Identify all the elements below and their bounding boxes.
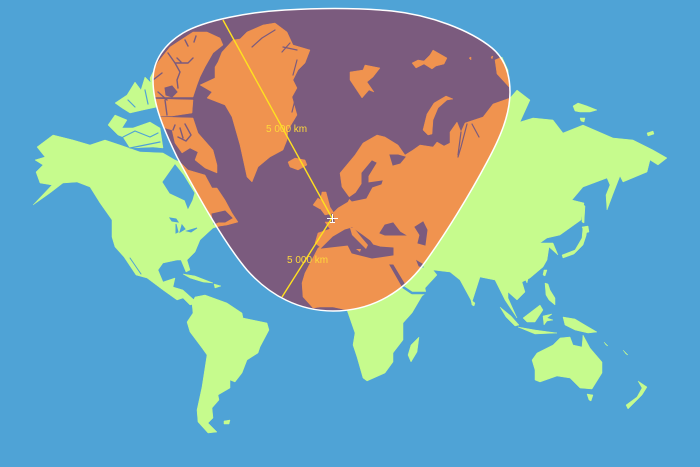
radius boundary outline — [153, 9, 510, 311]
distance label south: 5 000 km — [287, 255, 328, 266]
land inside the 5 000 km radius — [154, 22, 509, 310]
highlighted area: ocean inside radius — [153, 9, 510, 311]
distance label north: 5 000 km — [266, 124, 307, 135]
world map continents — [33, 23, 667, 433]
distance line north — [223, 20, 332, 218]
icon: origin plane marker — [327, 214, 338, 223]
distance line south-west — [282, 218, 332, 297]
seas and lakes outside the area — [123, 30, 479, 293]
